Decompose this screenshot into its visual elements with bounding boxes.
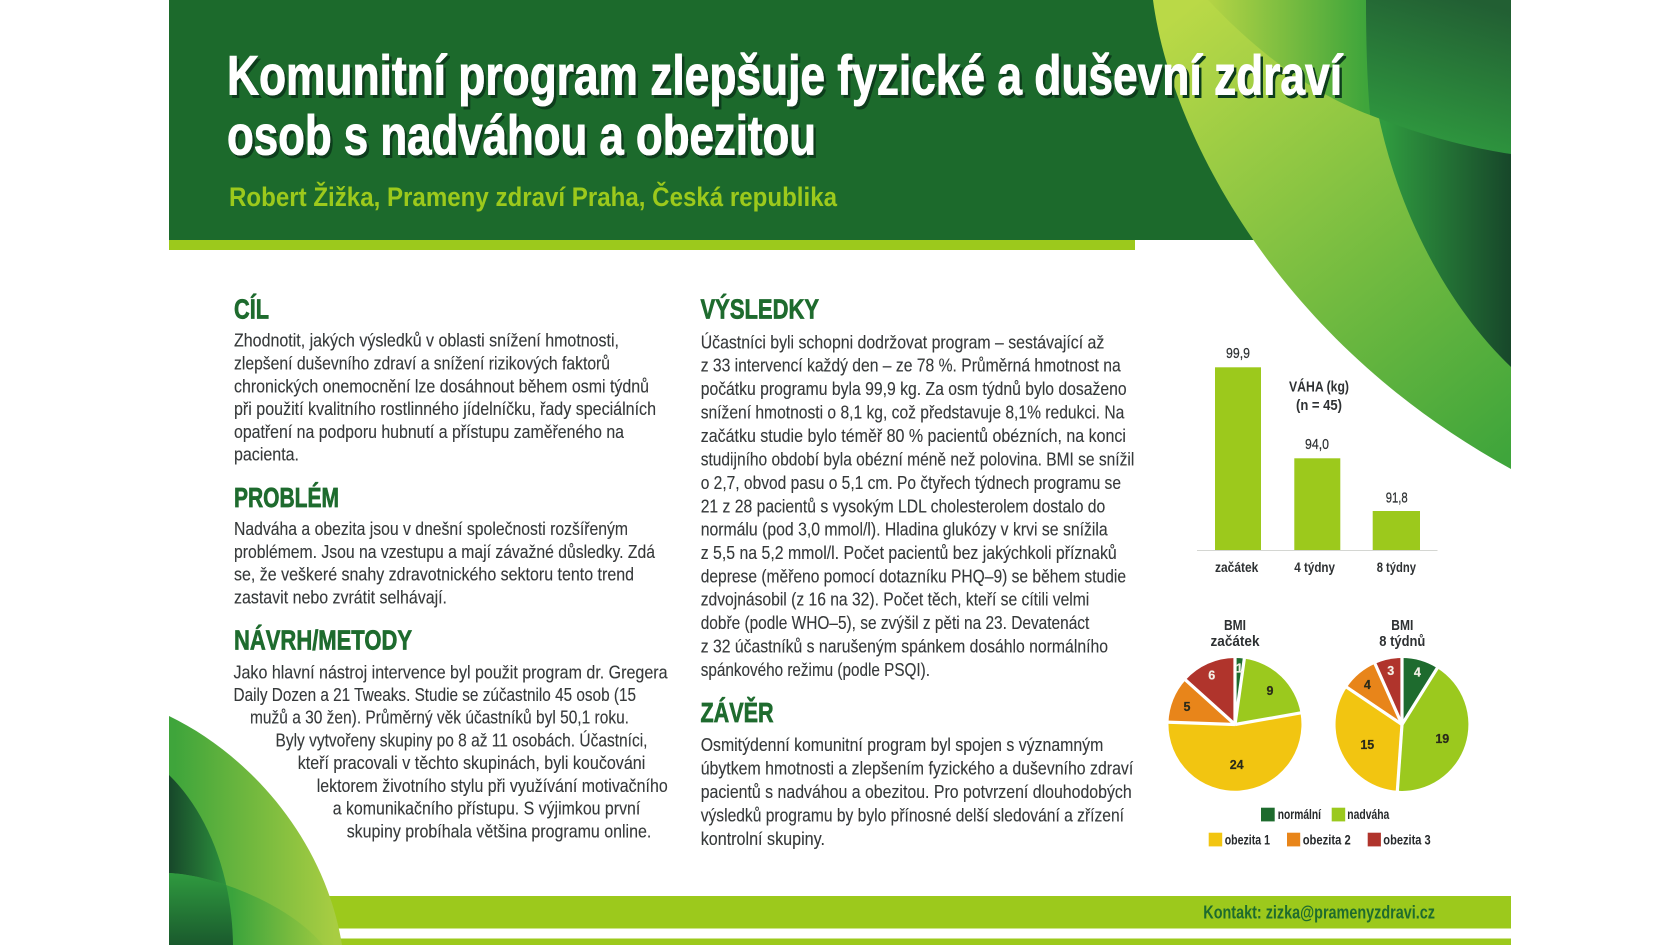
axis labels: začátek (1215, 559, 1258, 575)
pie title: BMI (1391, 617, 1413, 634)
text: cíl: pacienta. (234, 445, 299, 465)
heading: problém: PROBLÉM (234, 482, 339, 513)
heading: výsledky: VÝSLEDKY (700, 294, 819, 324)
legend: nadváha (1332, 806, 1389, 822)
bar: 8 týdny (1373, 511, 1420, 550)
text: výsledky: o 2,7, obvod pasu o 5,1 cm. Po čtyřech týdnech programu se (701, 473, 1121, 493)
text: výsledky: z 5,5 na 5,2 mmol/l. Počet pacientů bez jakýchkoli příznaků (701, 543, 1117, 563)
text: výsledky: začátku studie bylo téměř 80 % pacientů obézních, na konci (701, 426, 1126, 446)
pie title: 8 týdnů (1379, 633, 1425, 650)
legend: obezita 2 (1287, 831, 1351, 847)
legend: obezita 1 (1209, 831, 1270, 847)
text: návrh/metody (234, 662, 668, 841)
legend (1209, 806, 1431, 847)
legend: nadváha: nadváha (1347, 806, 1389, 822)
text: cíl: při použití kvalitního rostlinného jídelníčku, řady speciálních (234, 399, 656, 419)
legend: obezita 2: obezita 2 (1303, 831, 1351, 847)
text: výsledky: dobře (podle WHO–5), se zvýšil z pěti na 23. Devatenáct (701, 613, 1089, 633)
bar values: 94,0 (1305, 436, 1329, 453)
chart title: VÁHA (kg) (1289, 379, 1349, 396)
title: Komunitní program zlepšuje fyzické a duševní zdraví (227, 44, 1344, 106)
text: výsledky: počátku programu byla 99,9 kg. Za osm týdnů bylo dosaženo (701, 379, 1127, 399)
heading: návrh/metody: NÁVRH/METODY (234, 624, 412, 656)
text: cíl: Zhodnotit, jakých výsledků v oblasti snížení hmotnosti, (234, 331, 619, 351)
pie values: 4 (1364, 678, 1371, 692)
legend: normální (1261, 806, 1322, 822)
decoration: top right curved shapes (1153, 0, 1511, 469)
pie values: 15 (1360, 738, 1374, 752)
axis labels (1215, 559, 1416, 575)
pie title (1210, 617, 1260, 650)
text: závěr: úbytkem hmotnosti a zlepšením fyzického a duševního zdraví (701, 758, 1133, 778)
text: problém: zastavit nebo zvrátit selhávají. (234, 587, 447, 607)
pie values: 1 (1236, 662, 1243, 676)
text: problém: problémem. Jsou na vzestupu a mají závažné důsledky. Zdá (234, 542, 656, 562)
bar values (1226, 345, 1408, 506)
text: výsledky: zdvojnásobil (z 16 na 32). Počet těch, kteří se cítili velmi (701, 590, 1089, 610)
pie values: 19 (1435, 732, 1449, 746)
axis labels: 8 týdny (1377, 559, 1416, 575)
bar: začátek (1215, 367, 1261, 550)
text: závěr: výsledků programu by bylo přínosné delší sledování a zřízení (701, 806, 1124, 826)
bar values: 99,9 (1226, 345, 1250, 362)
pie values: 6 (1208, 668, 1215, 682)
bar values: 91,8 (1386, 489, 1408, 506)
footer stripes (169, 896, 1511, 945)
section: problém (234, 482, 656, 607)
text: návrh/metody: Byly vytvořeny skupiny po 8 až 11 osobách. Účastníci, (276, 729, 648, 750)
title (227, 44, 1344, 166)
pie title: BMI (1224, 617, 1246, 634)
text: návrh/metody: mužů a 30 žen). Průměrný věk účastníků byl 50,1 roku. (250, 708, 629, 728)
pie title: začátek (1210, 633, 1260, 650)
text: závěr (701, 735, 1133, 849)
pie title (1379, 617, 1425, 650)
pie values: 9 (1267, 684, 1274, 698)
text: výsledky: snížení hmotnosti o 8,1 kg, což představuje 8,1% redukci. Na (701, 402, 1125, 422)
text: výsledky: deprese (měřeno pomocí dotazníku PHQ–9) se během studie (701, 566, 1126, 586)
bar chart: váha (1197, 345, 1438, 575)
text: výsledky: z 32 účastníků s narušeným spánkem dosáhlo normálního (701, 636, 1108, 656)
text: výsledky: studijního období byla obézní méně než polovina. BMI se snížil (701, 449, 1134, 469)
text: výsledky: spánkového režimu (podle PSQI). (701, 660, 930, 680)
text: návrh/metody: skupiny probíhala většina programu online. (347, 821, 651, 841)
axis labels: 4 týdny (1294, 559, 1335, 575)
pie chart: BMI začátek (1166, 617, 1302, 791)
text: výsledky: normálu (pod 3,0 mmol/l). Hladina glukózy v krvi se snížila (701, 520, 1109, 540)
text: výsledky (701, 331, 1134, 680)
decoration: bottom left curved shapes (169, 716, 342, 945)
pie values: 24 (1230, 758, 1244, 772)
heading: cíl: CÍL (234, 294, 269, 324)
pie slices (1336, 656, 1468, 793)
text: návrh/metody: Daily Dozen a 21 Tweaks. Studie se zúčastnilo 45 osob (15 (234, 685, 636, 705)
pie chart: BMI 8 týdnů (1336, 617, 1468, 793)
pie values (1184, 662, 1274, 772)
pie slices (1166, 656, 1302, 791)
text: návrh/metody: kteří pracovali v těchto skupinách, byli koučováni (298, 753, 645, 773)
chart title (1289, 379, 1349, 414)
text: závěr: Osmitýdenní komunitní program byl spojen s významným (701, 735, 1103, 755)
pie values: 4 (1414, 666, 1421, 680)
pie values: 5 (1184, 700, 1191, 714)
text: problém: se, že veškeré snahy zdravotnického sektoru tento trend (234, 565, 634, 585)
pie values: 3 (1387, 664, 1394, 678)
text: návrh/metody: Jako hlavní nástroj intervence byl použit program dr. Gregera (234, 662, 668, 682)
chart title: (n = 45) (1296, 397, 1342, 414)
heading: závěr: ZÁVĚR (700, 697, 774, 728)
text: výsledky: Účastníci byli schopni dodržovat program – sestávající až (701, 331, 1104, 352)
text: závěr: pacientů s nadváhou a obezitou. Pro potvrzení dlouhodobých (701, 782, 1132, 802)
section: návrh/metody (234, 624, 668, 841)
text: cíl: opatření na podporu hubnutí a přístupu zaměřeného na (234, 422, 625, 442)
text: cíl: zlepšení duševního zdraví a snížení rizikových faktorů (234, 354, 610, 374)
author line: Robert Žižka, Prameny zdraví Praha, Česká republika (229, 181, 838, 212)
title: osob s nadváhou a obezitou (227, 104, 816, 166)
text: návrh/metody: a komunikačního přístupu. S výjimkou první (333, 799, 640, 819)
text: problém: Nadváha a obezita jsou v dnešní společnosti rozšířeným (234, 519, 628, 539)
text: výsledky: 21 z 28 pacientů s vysokým LDL cholesterolem dostalo do (701, 496, 1105, 516)
bar: 4 týdny (1294, 458, 1340, 550)
section: závěr (700, 697, 1133, 849)
text: návrh/metody: lektorem životního stylu při využívání motivačního (317, 776, 668, 796)
header band (169, 0, 1511, 240)
text: výsledky: z 33 intervencí každý den – ze 78 %. Průměrná hmotnost na (701, 356, 1122, 376)
text: závěr: kontrolní skupiny. (701, 829, 825, 849)
text: cíl (234, 331, 656, 465)
pie values (1360, 664, 1449, 752)
legend: normální: normální (1278, 806, 1322, 822)
text: cíl: chronických onemocnění lze dosáhnout během osmi týdnů (234, 376, 649, 396)
legend: obezita 3 (1368, 831, 1431, 847)
legend: obezita 1: obezita 1 (1225, 831, 1270, 847)
contact: Kontakt: zizka@pramenyzdravi.cz (1203, 902, 1435, 922)
section: cíl (234, 294, 656, 465)
section: výsledky (700, 294, 1134, 680)
text: problém (234, 519, 656, 607)
legend: obezita 3: obezita 3 (1383, 831, 1431, 847)
header lime stripe (169, 240, 1135, 250)
